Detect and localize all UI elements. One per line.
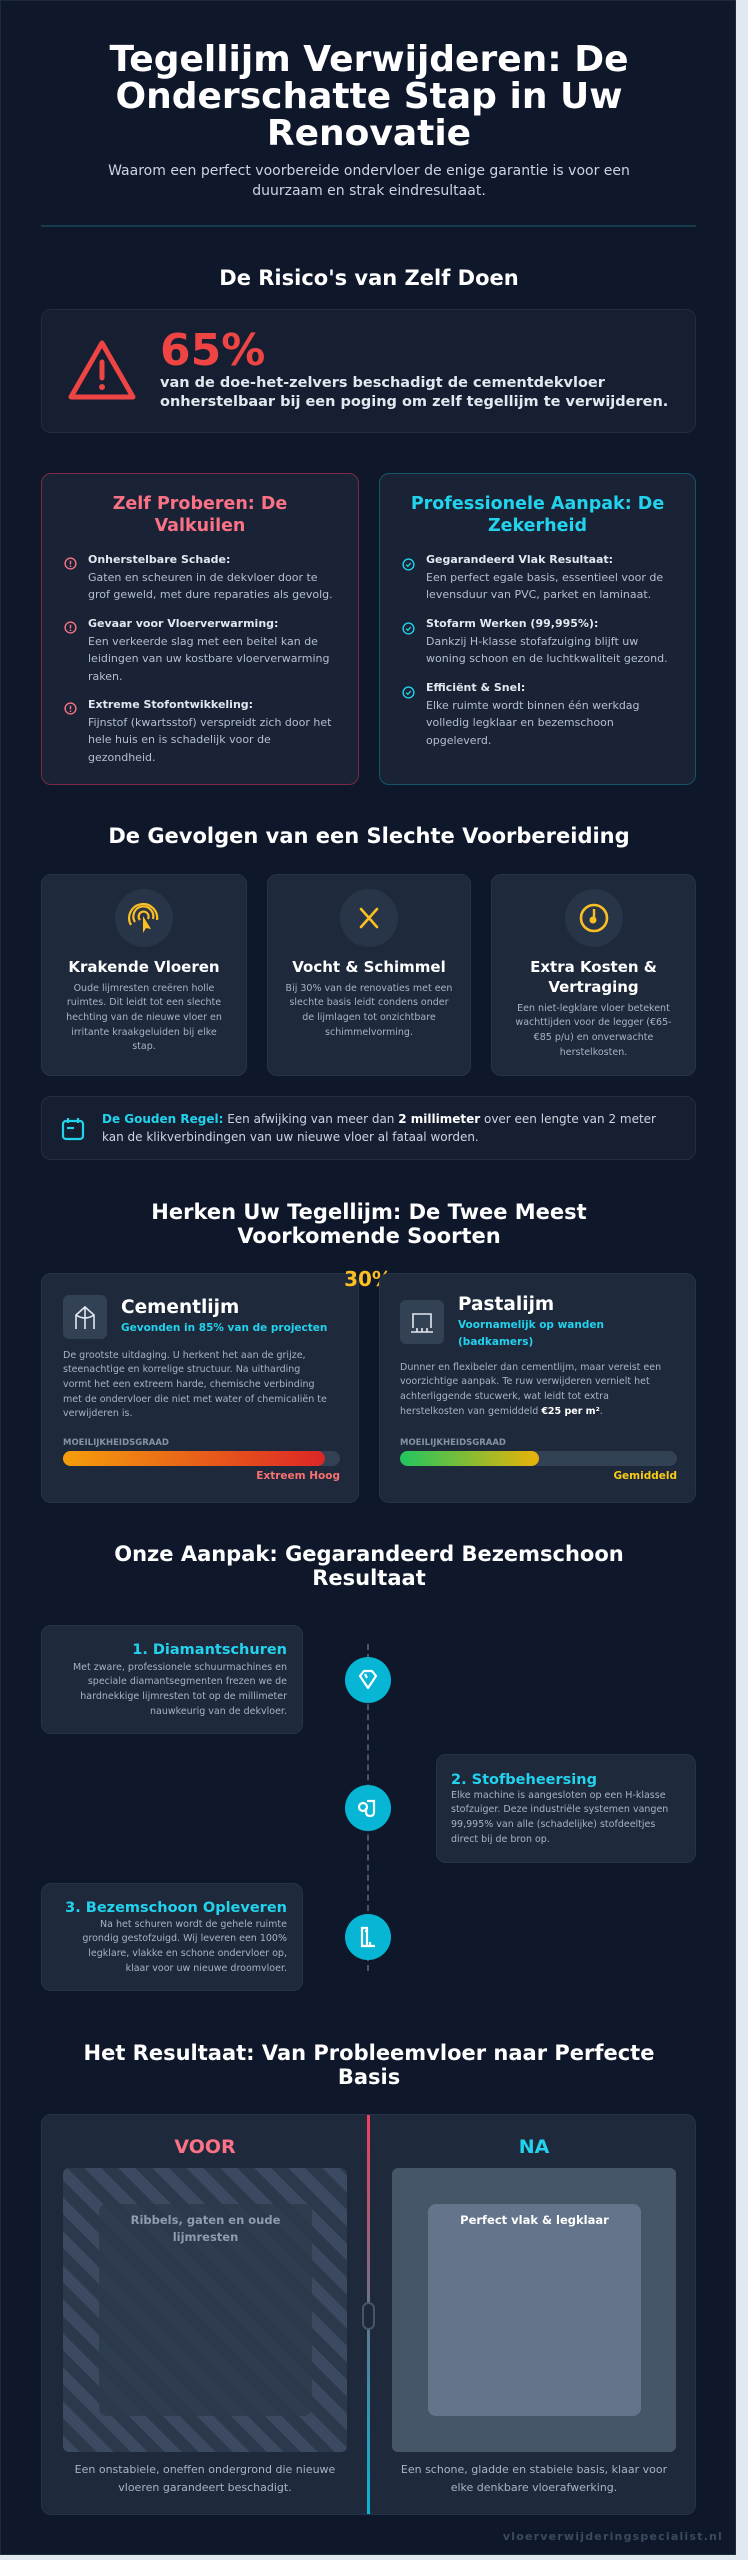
icon: broom xyxy=(345,1914,391,1960)
difficulty bar: MOEILIJKHEIDSGRAAD xyxy=(63,1438,169,1448)
desc: irritante kraakgeluiden bij elke xyxy=(71,1027,217,1038)
item 2: Gevaar voor Vloerverwarming: xyxy=(88,617,278,630)
title: Onderschatte Stap in Uw xyxy=(116,76,622,117)
title: Extra Kosten & xyxy=(530,958,657,976)
step 1: speciale diamantsegmenten frezen we de xyxy=(88,1676,287,1687)
stat text: onherstelbaar bij een poging om zelf tegellijm te verwijderen. xyxy=(160,394,668,410)
title: Cementlijm xyxy=(121,1297,239,1318)
subtitle: (badkamers) xyxy=(458,1336,533,1348)
item 3: opgeleverd. xyxy=(426,734,491,746)
step 3: grondig gestofzuigd. Wij leveren een 100% xyxy=(82,1933,287,1944)
before image: Ribbels, gaten en oude xyxy=(131,2213,280,2227)
subtitle: Waarom een perfect voorbereide ondervloer de enige garantie is voor een xyxy=(108,163,630,179)
icon: fingerprint tap xyxy=(115,889,173,947)
desc: slechte basis leidt condens onder xyxy=(289,997,449,1008)
step 3: 3. Bezemschoon Opleveren xyxy=(65,1900,287,1916)
item 2: Dankzij H-klasse stofafzuiging blijft uw xyxy=(426,634,638,648)
label voor: VOOR xyxy=(174,2136,236,2158)
item 3: Elke ruimte wordt binnen één werkdag xyxy=(426,698,640,712)
heading: resultaat: Het Resultaat: Van Probleemvloer naar Perfecte xyxy=(84,2041,654,2065)
desc: achterliggende stucwerk, wat leidt tot extra xyxy=(400,1391,609,1402)
difficulty bar: MOEILIJKHEIDSGRAAD xyxy=(400,1438,506,1448)
item 3 xyxy=(426,681,640,746)
icon: clock coin xyxy=(565,889,623,947)
desc: met de ondervloer die niet met water of chemicaliën te xyxy=(63,1394,327,1405)
step 1: hardnekkige lijmresten tot op de millimeter xyxy=(80,1691,287,1702)
caption voor: vloeren garandeert beschadigt. xyxy=(118,2481,292,2494)
stat number: 65% xyxy=(160,325,265,376)
subtitle: duurzaam en strak eindresultaat. xyxy=(252,183,486,199)
title: Vertraging xyxy=(548,978,639,996)
heading: herken: Herken Uw Tegellijm: De Twee Meest xyxy=(151,1200,587,1224)
item 1: Een perfect egale basis, essentieel voor de xyxy=(426,570,663,584)
item 2: leidingen van uw kostbare vloerverwarming xyxy=(88,652,330,665)
item 3 xyxy=(88,698,332,764)
desc: wachttijden voor de legger (€65- xyxy=(515,1017,672,1028)
icon: calendar xyxy=(62,1118,84,1140)
text: De Gouden Regel: Een afwijking van meer dan 2 millimeter over een lengte van 2 meter xyxy=(102,1112,656,1126)
step 3: klaar voor uw nieuwe droomvloer. xyxy=(126,1963,287,1974)
item 1: Onherstelbare Schade: xyxy=(88,553,230,566)
desc: schimmelvorming. xyxy=(325,1027,413,1038)
desc: vormt het een extreem harde, chemische verbinding xyxy=(63,1379,315,1390)
title xyxy=(530,958,657,996)
item 3: Extreme Stofontwikkeling: xyxy=(88,698,253,711)
desc xyxy=(515,1003,672,1058)
step 2 xyxy=(436,1754,696,1863)
heading: Zekerheid xyxy=(488,516,587,536)
difficulty bar: Extreem Hoog xyxy=(256,1470,340,1482)
step 2: Elke machine is aangesloten op een H-klasse xyxy=(451,1790,666,1801)
caption na xyxy=(401,2463,668,2494)
item 3: Efficiënt & Snel: xyxy=(426,681,525,694)
panel: voor/na xyxy=(41,2114,696,2515)
desc xyxy=(63,1350,327,1419)
step 2: direct bij de bron op. xyxy=(451,1834,550,1845)
step 2: stofzuiger. Deze industriële systemen vangen xyxy=(451,1804,668,1815)
after image: Perfect vlak & legklaar xyxy=(460,2213,609,2227)
heading: onze aanpak: Onze Aanpak: Gegarandeerd Bezemschoon xyxy=(114,1542,624,1566)
card: extra kosten xyxy=(491,874,696,1076)
desc xyxy=(66,983,222,1052)
desc xyxy=(400,1362,661,1417)
icons: check xyxy=(402,558,415,699)
label na: NA xyxy=(519,2136,549,2158)
title xyxy=(110,39,628,154)
heading: onze aanpak xyxy=(114,1542,624,1590)
heading: risico's: De Risico's van Zelf Doen xyxy=(219,266,519,290)
stat box xyxy=(41,309,696,433)
step 2: 99,995% van alle (schadelijke) stofdeeltjes xyxy=(451,1819,655,1830)
title: Tegellijm Verwijderen: De xyxy=(110,39,628,80)
caption na: elke denkbare vloerafwerking. xyxy=(451,2481,617,2494)
caption voor xyxy=(75,2463,335,2494)
desc: €85 p/u) en onverwachte xyxy=(534,1032,653,1043)
desc: verwijderen is. xyxy=(63,1408,132,1419)
item 3: Fijnstof (kwartsstof) verspreidt zich door het xyxy=(88,716,331,728)
card: krakende vloeren xyxy=(41,874,247,1076)
item 1 xyxy=(426,553,663,601)
step 1: 1. Diamantschuren xyxy=(132,1642,287,1658)
heading: resultaat xyxy=(84,2041,654,2089)
desc: Een niet-legklare vloer betekent xyxy=(517,1003,670,1014)
difficulty bar xyxy=(400,1438,677,1482)
heading: herken xyxy=(151,1200,587,1248)
card: cementlijm xyxy=(41,1273,359,1503)
icon: vacuum xyxy=(345,1785,391,1831)
title: Pastalijm xyxy=(458,1294,554,1315)
title: Krakende Vloeren xyxy=(68,958,220,976)
icon xyxy=(400,1300,444,1344)
icon: cross xyxy=(340,889,398,947)
item 2: Stofarm Werken (99,995%): xyxy=(426,617,598,630)
step 3 xyxy=(41,1883,303,1991)
desc xyxy=(286,983,452,1038)
icon xyxy=(63,1295,107,1339)
item 2 xyxy=(426,617,668,665)
desc: herstelkosten van gemiddeld €25 per m². xyxy=(400,1406,603,1417)
item 2: Een verkeerde slag met een beitel kan de xyxy=(88,634,318,648)
card: pastalijm xyxy=(379,1273,696,1503)
item 1: Gegarandeerd Vlak Resultaat: xyxy=(426,553,613,566)
panel: zelf proberen xyxy=(41,473,359,785)
subtitle: Voornamelijk op wanden xyxy=(458,1318,604,1330)
step 1: nauwkeurig van de dekvloer. xyxy=(150,1706,287,1717)
item 2: woning schoon en de luchtkwaliteit gezond. xyxy=(426,652,668,665)
step 1 xyxy=(41,1625,303,1734)
item 3: gezondheid. xyxy=(88,750,155,764)
title: Renovatie xyxy=(267,113,471,154)
text xyxy=(102,1112,656,1144)
heading: gevolgen: De Gevolgen van een Slechte Voorbereiding xyxy=(108,824,630,848)
item 1: levensduur van PVC, parket en laminaat. xyxy=(426,588,651,601)
stat text xyxy=(160,375,668,410)
item 2 xyxy=(88,617,330,682)
caption voor: Een onstabiele, oneffen ondergrond die nieuwe xyxy=(75,2463,335,2476)
desc: de lijmlagen tot onzichtbare xyxy=(302,1012,436,1023)
desc: voorzichtige aanpak. Te ruw verwijderen vernielt het xyxy=(400,1376,650,1387)
stat: 30%: 30% xyxy=(344,1267,392,1291)
item 1: grof geweld, met dure reparaties als gevolg. xyxy=(88,588,333,601)
step 3: legklare, vlakke en schone ondervloer op, xyxy=(88,1948,287,1959)
icons: alert xyxy=(64,557,77,715)
item 3: hele huis en is schadelijk voor de xyxy=(88,733,271,746)
step 3: Na het schuren wordt de gehele ruimte xyxy=(100,1919,287,1930)
subtitle: Gevonden in 85% van de projecten xyxy=(121,1322,327,1334)
step 2: 2. Stofbeheersing xyxy=(451,1772,597,1788)
subtitle xyxy=(458,1318,604,1348)
desc: Bij 30% van de renovaties met een xyxy=(286,983,452,994)
icon: warning triangle xyxy=(68,340,136,400)
caption na: Een schone, gladde en stabiele basis, klaar voor xyxy=(401,2463,667,2476)
heading: resultaat: Basis xyxy=(338,2065,400,2089)
subtitle xyxy=(108,163,630,199)
desc: Oude lijmresten creëren holle xyxy=(74,983,214,994)
item 1: Gaten en scheuren in de dekvloer door te xyxy=(88,570,318,584)
item 3: volledig legklaar en bezemschoon xyxy=(426,716,614,729)
timeline line xyxy=(367,1644,369,1971)
callout: gouden regel xyxy=(41,1096,696,1160)
difficulty bar: Gemiddeld xyxy=(613,1470,677,1482)
desc: Dunner en flexibeler dan cementlijm, maar vereist een xyxy=(400,1362,661,1373)
title: Vocht & Schimmel xyxy=(292,958,446,976)
before image xyxy=(63,2168,347,2452)
icon: diamond xyxy=(345,1657,391,1703)
divider slider xyxy=(367,2115,370,2514)
stat text: van de doe-het-zelvers beschadigt de cementdekvloer xyxy=(160,375,605,391)
heading xyxy=(411,494,664,536)
after image xyxy=(392,2168,676,2452)
step 1: Met zware, professionele schuurmachines en xyxy=(73,1662,287,1673)
heading: Professionele Aanpak: De xyxy=(411,494,664,514)
item 2: raken. xyxy=(88,670,122,682)
desc: stap. xyxy=(132,1041,156,1052)
card: vocht & schimmel xyxy=(267,874,471,1076)
text: kan de klikverbindingen van uw nieuwe vloer al fataal worden. xyxy=(102,1130,479,1144)
heading: onze aanpak: Resultaat xyxy=(312,1566,426,1590)
footer: vloerverwijderingspecialist.nl xyxy=(503,2530,723,2543)
desc: De grootste uitdaging. U herkent het aan de grijze, xyxy=(63,1350,306,1361)
before image: lijmresten xyxy=(173,2230,238,2244)
heading: herken: Voorkomende Soorten xyxy=(237,1224,501,1248)
desc: ruimtes. Dit leidt tot een slechte xyxy=(67,997,221,1008)
panel: professionele aanpak xyxy=(379,473,696,785)
heading xyxy=(113,494,287,536)
item 1 xyxy=(88,553,333,601)
desc: hechting van de nieuwe vloer en xyxy=(66,1012,222,1023)
difficulty bar xyxy=(63,1438,340,1482)
heading: Zelf Proberen: De xyxy=(113,494,287,514)
desc: herstelkosten. xyxy=(560,1047,627,1058)
desc: steenachtige en korrelige structuur. Na uitharding xyxy=(63,1364,300,1375)
heading: Valkuilen xyxy=(155,516,245,536)
